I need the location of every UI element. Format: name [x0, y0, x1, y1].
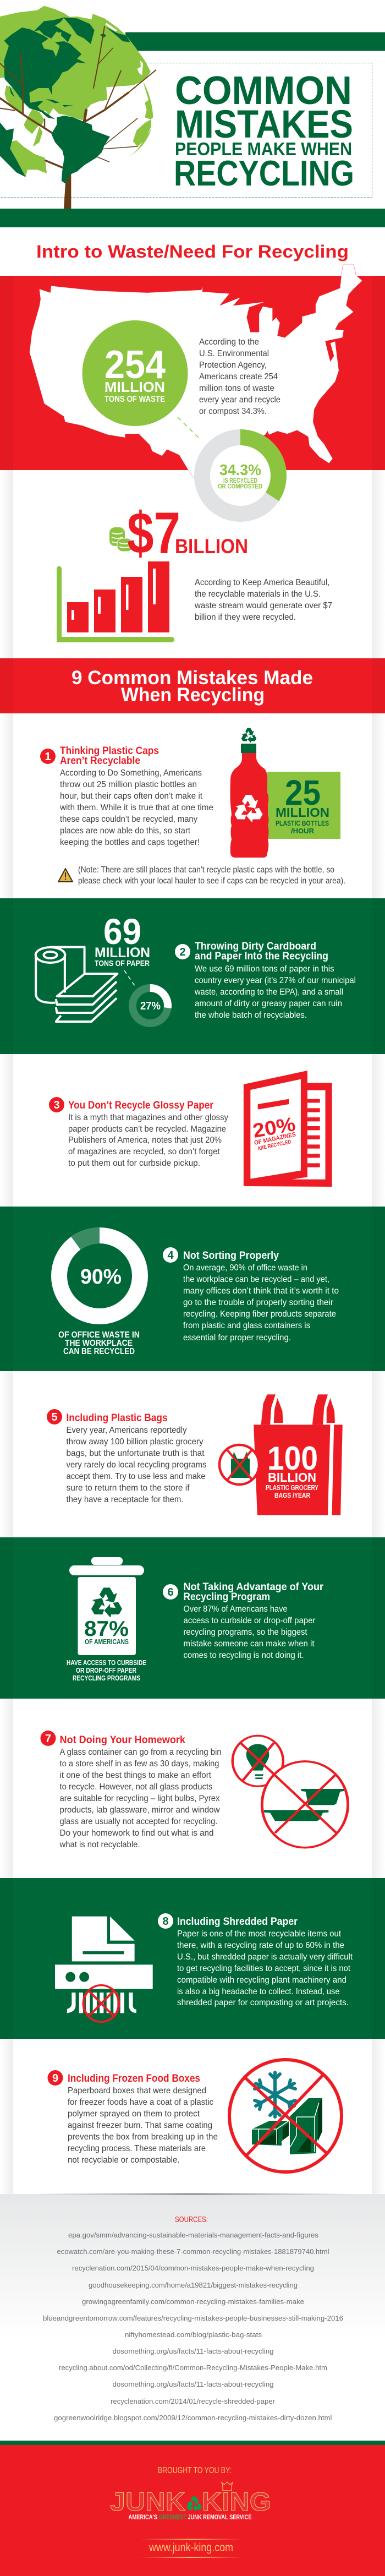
- body 9: prevents the box from breaking up in the: [68, 2132, 218, 2142]
- website link: www.junk-king.com: [148, 2541, 233, 2554]
- text: EPA: [199, 337, 280, 416]
- body 8: to get recycling facilities to accept, since it is not: [177, 1964, 351, 1973]
- heading 7: Not Doing Your Homework: [59, 1734, 185, 1746]
- body 4: the workplace can be recycled – and yet,: [183, 1275, 329, 1284]
- icon: plastic bag: 100: [267, 1440, 318, 1477]
- stat: $7 billion: $7: [127, 500, 180, 566]
- connector dashes: [178, 417, 200, 439]
- body 5: [66, 1426, 207, 1504]
- body 2: amount of dirty or greasy paper can ruin: [195, 999, 342, 1008]
- icon: plastic bag: [219, 1394, 343, 1515]
- body 5: very rarely do local recycling programs: [66, 1460, 207, 1470]
- number 5: [47, 1409, 62, 1425]
- panel: mistake 3: [49, 1071, 332, 1187]
- logo: Junk King: JUNK REMOVAL SERVICE: [188, 2513, 252, 2521]
- icon: warning: [58, 869, 73, 882]
- stat: 254 million tons: 254: [105, 343, 166, 387]
- icon: recycling bin: 87%: [84, 1617, 129, 1641]
- note: [78, 865, 345, 886]
- caption: curbside access: HAVE ACCESS TO CURBSIDE: [67, 1658, 146, 1667]
- body 3: paper products can’t be recycled. Magazine: [68, 1125, 226, 1134]
- caption: office waste: OF OFFICE WASTE IN: [58, 1330, 140, 1340]
- number 1: 1: [45, 751, 51, 763]
- body 1: throw out 25 million plastic bottles an: [60, 780, 197, 789]
- text: EPA: or compost 34.3%.: [199, 407, 267, 416]
- sources list: [43, 2231, 343, 2422]
- title dashed frame: [0, 63, 372, 198]
- number 2: 2: [179, 946, 186, 958]
- number 9: [47, 2070, 63, 2086]
- sources list: recyclenation.com/2015/04/common-mistakes-people-make-when-recycling: [72, 2264, 314, 2272]
- chart: 34.3 percent donut: OR COMPOSTED: [218, 483, 262, 490]
- heading 1: [60, 745, 159, 767]
- body 7: are suitable for recycling – light bulbs, Pyrex: [59, 1794, 220, 1803]
- text: Keep America Beautiful: [194, 578, 332, 622]
- caption: curbside access: OR DROP-OFF PAPER: [76, 1666, 136, 1674]
- body 1: [59, 768, 213, 847]
- number 7: 7: [45, 1733, 51, 1745]
- body 8: [177, 1929, 353, 2007]
- body 7: what is not recyclable.: [59, 1840, 140, 1849]
- body 5: Every year, Americans reportedly: [66, 1426, 187, 1435]
- page side shadows: [0, 276, 385, 2194]
- icon: plastic bag: BILLION: [268, 1470, 316, 1485]
- note: please check with your local hauler to see if caps can be recycled in your area).: [78, 876, 345, 886]
- body 7: A glass container can go from a recycling bin: [59, 1748, 221, 1757]
- body 1: places are now able do this, so start: [60, 826, 191, 836]
- body 5: they have a receptacle for them.: [66, 1495, 184, 1504]
- sources list: niftyhomestead.com/blog/plastic-bag-stats: [125, 2331, 262, 2339]
- stat card: 25 million bottles: PLASTIC BOTTLES: [276, 820, 329, 827]
- icon: bottle: [230, 728, 268, 858]
- stat: 254 million tons: MILLION: [105, 379, 165, 395]
- panel: mistake 1: [40, 728, 345, 886]
- panel: mistake 8: [0, 1878, 385, 2039]
- body 7: glass are usually not accepted for recycling.: [59, 1817, 218, 1826]
- body 8: there, with a recycling rate of up to 60% in the: [177, 1941, 344, 1950]
- icon: magazine: 20%: [251, 1112, 297, 1142]
- body 8: Paper is one of the most recyclable items out: [177, 1929, 342, 1939]
- text: EPA: Americans create 254: [199, 372, 278, 381]
- body 1: with them. While it is true that at one time: [59, 803, 213, 812]
- number 8: 8: [162, 1915, 169, 1928]
- body 6: mistake someone can make when it: [184, 1639, 315, 1649]
- heading 6: Recycling Program: [184, 1591, 270, 1603]
- stat card: 25 million bottles: 25: [285, 773, 321, 812]
- number 2: [175, 944, 190, 959]
- sources list: dosomething.org/us/facts/11-facts-about-recycling: [112, 2380, 274, 2388]
- logo: Junk King: GREENEST: [159, 2513, 187, 2521]
- icon: magazine: OF MAGAZINES: [254, 1131, 296, 1147]
- logo: Junk King: AMERICA’S: [129, 2513, 157, 2521]
- stat card: 25 million bottles: MILLION: [276, 805, 329, 820]
- panel: mistake 9: [47, 2060, 342, 2172]
- body 3: It is a myth that magazines and other glossy: [68, 1113, 228, 1122]
- body 8: compatible with recycling plant machinery and: [177, 1975, 346, 1985]
- number 5: 5: [51, 1411, 58, 1423]
- body 9: not recyclable or compostable.: [68, 2155, 179, 2165]
- chart: 27 percent donut: [133, 988, 168, 1023]
- sources list: epa.gov/smm/advancing-sustainable-materials-management-facts-and-figures: [68, 2231, 319, 2239]
- body 6: recycling programs, so the biggest: [184, 1628, 307, 1637]
- sources list: goodhousekeeping.com/home/a19821/biggest-mistakes-recycling: [89, 2281, 298, 2289]
- body 4: many offices don’t think that it’s worth it to: [183, 1286, 339, 1296]
- heading: intro: Intro to Waste/Need For Recycling: [36, 242, 349, 261]
- number 3: [49, 1097, 64, 1112]
- panel: footer: [0, 2441, 385, 2576]
- US map: [30, 264, 362, 478]
- body 5: sure to return them to the store if: [66, 1483, 190, 1493]
- body 3: of magazines are recycled, so don’t forget: [68, 1147, 220, 1156]
- body 4: On average, 90% of office waste in: [183, 1263, 307, 1273]
- body 8: shredded paper for composting or art projects.: [177, 1998, 349, 2007]
- title: [174, 69, 354, 193]
- body 6: comes to recycling is not doing it.: [184, 1651, 304, 1660]
- chart: 34.3 percent donut: [194, 429, 287, 522]
- number 6: [163, 1584, 178, 1600]
- icon: shredder: [55, 1917, 153, 2022]
- chart: rising bars: [57, 561, 174, 642]
- icon: coins: [109, 527, 133, 552]
- stat card: 25 million bottles: [267, 772, 340, 839]
- icon: plastic bag: PLASTIC GROCERY: [266, 1484, 319, 1492]
- heading 6: [184, 1581, 324, 1603]
- heading 8: Including Shredded Paper: [177, 1916, 298, 1928]
- body 4: essential for proper recycling.: [183, 1333, 291, 1342]
- body 6: Over 87% of Americans have: [184, 1604, 287, 1614]
- chart: 90 percent donut: 90%: [80, 1265, 122, 1289]
- title: RECYCLING: [174, 153, 354, 193]
- icon: recycling bin: OF AMERICANS: [85, 1638, 129, 1646]
- chart: 90 percent donut: [43, 1219, 156, 1333]
- stat: 69 million: TONS OF PAPER: [95, 959, 150, 968]
- text: EPA: Protection Agency,: [199, 361, 267, 370]
- heading 2: [195, 941, 328, 962]
- heading 2: Throwing Dirty Cardboard: [195, 941, 316, 952]
- stat: 69 million: 69: [103, 911, 141, 952]
- heading 6: Not Taking Advantage of Your: [184, 1581, 324, 1593]
- text: Keep America Beautiful: waste stream would generate over $7: [194, 601, 332, 610]
- heading band: 9 common mistakes: [0, 658, 385, 713]
- logo: Junk King: KING: [202, 2487, 271, 2516]
- logo: Junk King: [110, 2482, 271, 2521]
- panel: mistake 2: [0, 898, 385, 1054]
- chart: 27 percent donut: 27%: [140, 1000, 161, 1012]
- body 6: access to curbside or drop-off paper: [184, 1616, 316, 1625]
- sources list: ecowatch.com/are-you-making-these-7-common-recycling-mistakes-1881879740.html: [57, 2247, 329, 2256]
- body 9: recycling process. These materials are: [68, 2144, 206, 2153]
- number 9: 9: [52, 2072, 58, 2084]
- header: [0, 6, 385, 227]
- header bottom band: [0, 209, 385, 227]
- stat: $7 billion: [109, 500, 248, 566]
- body 4: recycling. Keeping fiber products separate: [183, 1309, 336, 1319]
- body 7: [59, 1748, 221, 1849]
- number 7: [41, 1731, 56, 1746]
- body 5: throw away 100 billion plastic grocery: [66, 1437, 204, 1447]
- logo: Junk King: JUNK: [110, 2487, 185, 2516]
- body 6: [184, 1604, 316, 1660]
- sources list: growingagreenfamily.com/common-recycling-mistakes-families-make: [82, 2297, 304, 2306]
- body 5: bags, but the unfortunate truth is that: [66, 1449, 205, 1458]
- icon: paper roll and stack: [36, 947, 117, 1022]
- number 8: [158, 1913, 173, 1929]
- sources heading: SOURCES:: [175, 2215, 208, 2224]
- body 1: hour, but their caps often don’t make it: [60, 792, 203, 801]
- sources list: dosomething.org/us/facts/11-facts-about-recycling: [112, 2347, 274, 2355]
- stat: 69 million: MILLION: [95, 945, 150, 960]
- sources list: recyclenation.com/2014/01/recycle-shredded-paper: [111, 2397, 276, 2405]
- heading 9: Including Frozen Food Boxes: [68, 2073, 200, 2084]
- heading 5: Including Plastic Bags: [66, 1412, 167, 1424]
- number 4: 4: [167, 1249, 174, 1262]
- icon: no glass items: [233, 1735, 348, 1848]
- body 7: products, lab glassware, mirror and window: [59, 1805, 220, 1815]
- panel: mistake 5: [47, 1394, 343, 1515]
- body 2: We use 69 million tons of paper in this: [195, 964, 334, 974]
- body 9: [68, 2086, 218, 2165]
- heading 4: Not Sorting Properly: [183, 1250, 279, 1262]
- text: Keep America Beautiful: billion if they were recycled.: [195, 613, 296, 622]
- body 9: for freezer foods have a coat of a plastic: [68, 2098, 213, 2107]
- connector dashes: [124, 970, 135, 986]
- icon: no bags: [219, 1445, 259, 1485]
- body 7: to recycle. However, not all glass products: [59, 1782, 213, 1792]
- chart: 34.3 percent donut: IS RECYCLED: [223, 478, 257, 484]
- stat: 254 million tons: [82, 320, 188, 426]
- caption: office waste: THE WORKPLACE: [65, 1339, 133, 1348]
- number 4: [163, 1247, 178, 1263]
- panel: sources: [0, 2193, 385, 2422]
- icon: recycling bin: [69, 1557, 144, 1655]
- body 1: keeping the bottles and caps together!: [60, 838, 200, 847]
- icon: no frozen boxes: [229, 2060, 342, 2172]
- panel: mistake 6: [0, 1537, 385, 1699]
- body 3: Publishers of America, notes that just 20%: [68, 1136, 222, 1145]
- panel: mistake 4: [0, 1207, 385, 1371]
- heading 1: Thinking Plastic Caps: [60, 745, 159, 757]
- number 3: 3: [53, 1099, 60, 1111]
- icon: magazine: [244, 1071, 332, 1187]
- body 3: to put them out for curbside pickup.: [68, 1159, 200, 1168]
- number 6: 6: [167, 1586, 174, 1598]
- heading band: 9 common mistakes: 9 Common Mistakes Made: [72, 667, 313, 689]
- body 7: it one of the best things to make an effort: [59, 1771, 212, 1780]
- brought to you by: BROUGHT TO YOU BY:: [158, 2466, 232, 2475]
- icon: globe tree: [0, 6, 156, 209]
- header top band: [125, 32, 385, 51]
- body 4: go to the trouble of properly sorting their: [183, 1298, 333, 1307]
- caption: curbside access: [67, 1658, 146, 1682]
- body 9: against freezer burn. That same coating: [68, 2121, 212, 2130]
- number 1: [40, 749, 56, 764]
- chart: 34.3 percent donut: 34.3%: [219, 461, 261, 478]
- text: EPA: every year and recycle: [199, 395, 280, 405]
- body 3: [68, 1113, 228, 1168]
- caption: curbside access: RECYCLING PROGRAMS: [73, 1674, 140, 1682]
- title: COMMON: [175, 69, 352, 113]
- text: EPA: million tons of waste: [199, 384, 274, 393]
- caption: office waste: CAN BE RECYCLED: [63, 1347, 135, 1356]
- text: Keep America Beautiful: the recyclable materials in the U.S.: [195, 590, 321, 599]
- body 1: According to Do Something, Americans: [60, 768, 202, 778]
- body 2: [194, 964, 356, 1020]
- sources list: blueandgreentomorrow.com/features/recycling-mistakes-people-businesses-still-making-2016: [43, 2314, 343, 2322]
- body 9: polymer sprayed on them to protect: [68, 2109, 200, 2119]
- stat: 69 million: [95, 911, 150, 968]
- heading 3: You Don’t Recycle Glossy Paper: [68, 1100, 214, 1111]
- body 8: is also a big headache to collect. Instead, use: [177, 1987, 340, 1996]
- text: EPA: According to the: [199, 337, 259, 347]
- body 9: Paperboard boxes that were designed: [68, 2086, 206, 2095]
- title: MISTAKES: [175, 103, 353, 146]
- body 2: country every year (it’s 27% of our municipal: [195, 976, 356, 985]
- body 4: from plastic and glass containers is: [183, 1321, 310, 1330]
- body 5: accept them. Try to use less and make: [66, 1472, 206, 1481]
- heading 1: Aren’t Recyclable: [60, 755, 140, 767]
- text: Keep America Beautiful: According to Keep America Beautiful,: [195, 578, 330, 587]
- body 7: Do your homework to find out what is and: [59, 1829, 213, 1838]
- panel: intro red band: [0, 264, 385, 478]
- body 4: [183, 1263, 339, 1342]
- body 7: to a store shelf in as few as 30 days, making: [59, 1759, 219, 1769]
- body 1: these caps couldn’t be recycled, many: [60, 815, 197, 824]
- icon: plastic bag: BAGS /YEAR: [274, 1492, 310, 1499]
- body 2: waste, according to the EPA), and a small: [194, 987, 343, 997]
- stat card: 25 million bottles: /HOUR: [291, 827, 314, 835]
- body 8: U.S., but shredded paper is actually very difficult: [177, 1952, 353, 1962]
- panel: mistake 7: [41, 1731, 348, 1849]
- stat: $7 billion: BILLION: [175, 535, 248, 558]
- heading band: 9 common mistakes: When Recycling: [121, 684, 265, 706]
- sources list: recycling.about.com/od/Collecting/fl/Common-Recycling-Mistakes-People-Make.htm: [59, 2364, 327, 2372]
- body 2: the whole batch of recyclables.: [195, 1011, 307, 1020]
- note: (Note: There are still places that can’t recycle plastic caps with the bottle, so: [78, 865, 334, 875]
- stat: 254 million tons: TONS OF WASTE: [105, 395, 165, 404]
- heading 2: and Paper Into the Recycling: [195, 951, 328, 962]
- sources list: gogreenwoolridge.blogspot.com/2009/12/common-recycling-mistakes-dirty-dozen.html: [54, 2414, 332, 2422]
- caption: office waste: [58, 1330, 140, 1356]
- icon: magazine: ARE RECYCLED: [257, 1139, 292, 1152]
- title: PEOPLE MAKE WHEN: [175, 139, 352, 159]
- text: EPA: U.S. Environmental: [199, 349, 269, 358]
